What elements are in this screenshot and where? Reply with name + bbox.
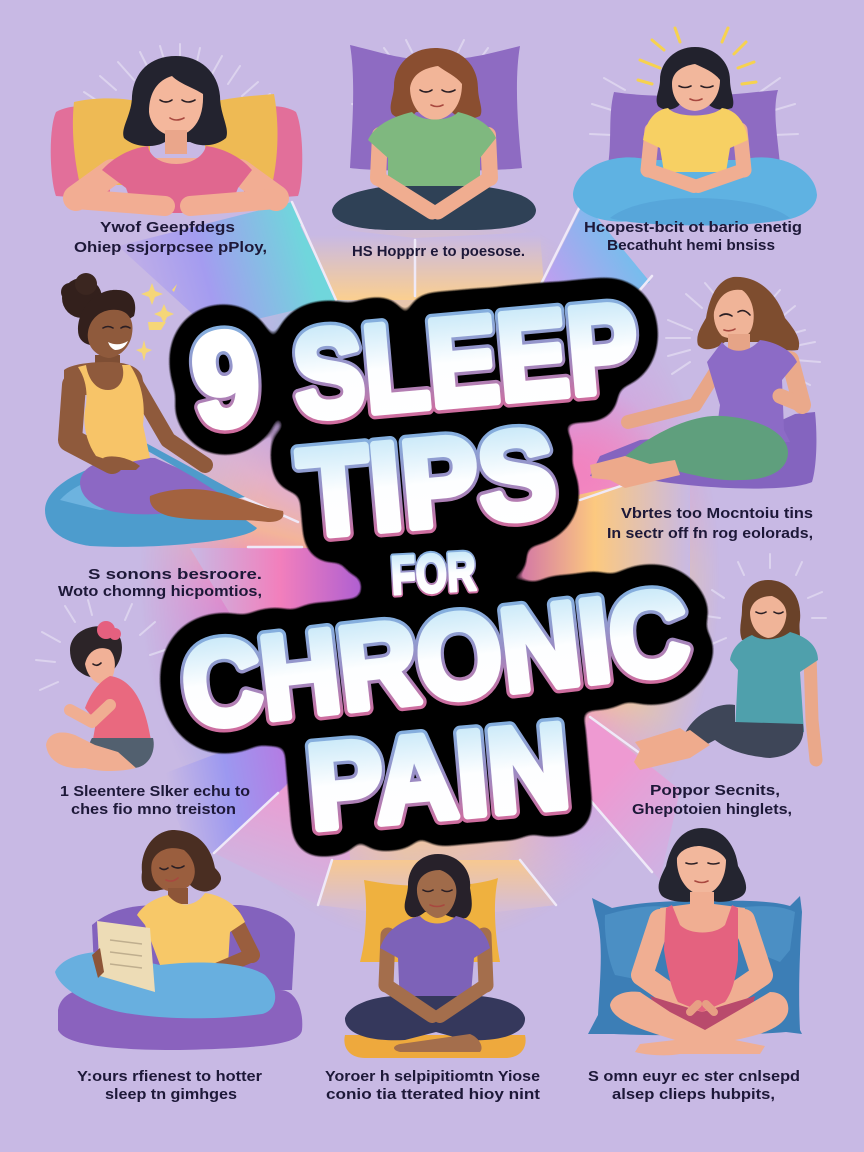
title: 9 Sleep Tips for Chronic Pain: CHRONIC [176,565,695,754]
caption 6 [60,784,250,818]
title: 9 Sleep Tips for Chronic Pain [176,278,695,855]
caption 3 [584,220,802,254]
title: 9 Sleep Tips for Chronic Pain: CHRONIC [176,565,695,754]
caption 1: Ywof Geepfdegs [100,220,235,236]
rainbow sunburst background [155,229,711,920]
figure 10: woman in pink tank top on blue pillows [588,828,802,1055]
caption 9 [325,1069,540,1103]
caption 5 [607,506,813,542]
title: 9 Sleep Tips for Chronic Pain: CHRONIC [176,565,695,754]
caption 9: Yoroer h selpipitiomtn Yiose [325,1069,540,1085]
caption 7: Ghepotoien hinglets, [632,802,792,818]
title: 9 Sleep Tips for Chronic Pain: 9 [187,303,265,456]
caption 9: conio tia tterated hioy nint [326,1087,540,1103]
figure 6: woman with pink hair tie cross-legged [36,600,165,771]
title: 9 Sleep Tips for Chronic Pain: TIPS [294,404,561,564]
title: 9 Sleep Tips for Chronic Pain: SLEEP [288,278,644,446]
caption 4 [58,567,262,600]
coloured light rays [118,202,690,915]
caption 4: S sonons besroore. [88,567,262,583]
figure 7: woman in teal shirt leaning back [634,554,826,770]
caption 1: Ohiep ssjorpcsee pPloy, [74,240,267,256]
caption 2: HS Hopprr e to poesose. [352,244,525,260]
caption 3: Becathuht hemi bnsiss [607,238,775,254]
title: 9 Sleep Tips for Chronic Pain: PAIN [302,699,575,855]
caption 4: Woto chomng hicpomtios, [58,584,262,600]
title: 9 Sleep Tips for Chronic Pain: PAIN [302,699,575,855]
figure 4: smiling woman seated on blue cushion [45,273,283,547]
caption 10: S omn euyr ec ster cnlsepd [588,1069,800,1085]
caption 8 [77,1069,262,1103]
title: 9 Sleep Tips for Chronic Pain: PAIN [302,699,575,855]
caption 10: alsep clieps hubpits, [612,1087,775,1103]
caption 7 [632,783,792,818]
title: 9 Sleep Tips for Chronic Pain: SLEEP [288,278,644,446]
caption 5: Vbrtes too Mocntoiu tins [621,506,813,522]
title: 9 Sleep Tips for Chronic Pain: TIPS [294,404,561,564]
title: 9 Sleep Tips for Chronic Pain: FOR [390,542,478,606]
figure 1: woman on yellow and pink pillows [51,44,302,213]
caption 8: Y:ours rfienest to hotter [77,1069,262,1085]
caption 6: 1 Sleentere Slker echu to [60,784,250,800]
title: 9 Sleep Tips for Chronic Pain: SLEEP [288,278,644,446]
caption 1 [74,220,267,256]
caption 3: Hcopest-bcit ot bario enetig [584,220,802,236]
caption 6: ches fio mno treiston [71,802,236,818]
caption 5: In sectr off fn rog eolorads, [607,526,813,542]
title: 9 Sleep Tips for Chronic Pain: 9 [187,303,265,456]
figure 8: woman reading in purple cushion [55,830,302,1050]
title: 9 Sleep Tips for Chronic Pain: FOR [390,542,478,606]
figure 5: woman with wavy hair on purple cushion [590,277,820,489]
figure 9: woman in purple shirt on orange pillow [344,854,526,1058]
figure 3: woman in yellow shirt on blue cushion [573,28,817,226]
caption 10 [588,1069,800,1103]
title: 9 Sleep Tips for Chronic Pain: 9 [187,303,265,456]
caption 7: Poppor Secnits, [650,783,780,799]
figure 2: woman in green shirt cross-legged [332,40,536,230]
title: 9 Sleep Tips for Chronic Pain: TIPS [294,404,561,564]
caption 8: sleep tn gimhges [105,1087,237,1103]
